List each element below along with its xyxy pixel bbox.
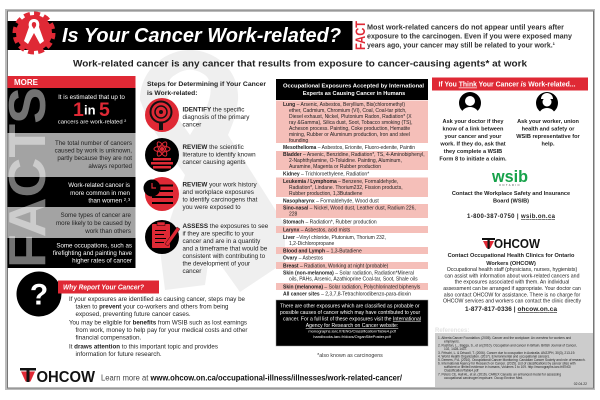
references: 2. Rushton, L., Bagga, S., et al (2010). Occupation and cancer in Britain. British Journal of Cancer, bbox=[438, 344, 577, 348]
fact: men and women: more common in men bbox=[70, 190, 131, 197]
why report text: from work, money to help pay for your medical costs and other bbox=[76, 327, 248, 334]
why report banner: Why Report Your Cancer? bbox=[63, 284, 145, 292]
doctor advice text: Form 8 to initiate a claim. bbox=[439, 156, 507, 162]
table rows: Liver –Vinyl chloride, Plutonium, Thorium 232, bbox=[283, 235, 386, 241]
WSIB contact: Contact the Workplace Safety and Insurance bbox=[452, 191, 570, 197]
fact: types of cancer: more likely to be caused by bbox=[56, 220, 132, 227]
subtitle: Work-related cancer is any cancer that results from exposure to cancer-causing agents* at work bbox=[73, 58, 528, 70]
fact text: exposure to the carcinogen. Even if you were exposed many bbox=[367, 32, 572, 40]
fact text: years ago, your cancer may still be related to your work.¹ bbox=[367, 40, 556, 50]
one in five statistic: 1 bbox=[73, 99, 84, 121]
references: 1. Alberta Cancer Foundation. (2005). Cancer and the workplace: An overview for workers and bbox=[438, 336, 571, 340]
black note box: monographs.iarc.fr/ENG/Classification/Table4.pdf bbox=[308, 328, 397, 334]
references: employers. bbox=[444, 340, 460, 344]
OHCOW contact heading: Contact Occupational Health Clinics for Ontario bbox=[448, 253, 575, 259]
fact: men and women: than women ²˒³ bbox=[88, 198, 130, 204]
icon: worker bbox=[536, 92, 558, 115]
fact: unknown total bbox=[55, 140, 133, 170]
why report text: financial compensation. bbox=[76, 334, 142, 342]
why report icon: question mark bbox=[16, 272, 62, 316]
fact: unknown total: always reported bbox=[88, 163, 133, 170]
fact: occupations: higher rates of cancer bbox=[72, 258, 132, 264]
step 1 text bbox=[182, 106, 250, 128]
fact: occupations: firefighting and painting have bbox=[53, 250, 133, 257]
why report text: information for future research. bbox=[76, 351, 162, 358]
table rows: Rubber production, 1,3Butadiene bbox=[289, 191, 363, 197]
table rows: Skin (melanoma) – Solar radiation, Polychlorinated biphenyls bbox=[283, 284, 421, 290]
table rows: Bladder – Arsenic, Benzidine, Radiation*, TS, 4-Aminobiphenyl, bbox=[283, 152, 425, 158]
black note box: handbooks.iarc.fr/docs/OrganSitePoster.pdf bbox=[313, 334, 392, 339]
WSIB contact: Board (WSIB) bbox=[493, 198, 529, 204]
learn more link: Learn more at www.ohcow.on.ca/occupational-illness/illnesses/work-related-cancer/ bbox=[101, 374, 403, 382]
title bar bbox=[8, 21, 352, 50]
fact: unknown total: partly because they are not bbox=[57, 155, 132, 162]
doctor advice text: work. If they do, ask that bbox=[439, 142, 506, 148]
references: occupational carcinogen exposure. Occup Environ Med. bbox=[444, 376, 523, 380]
step 1 text: IDENTIFY the specific bbox=[182, 106, 244, 114]
OHCOW body text: also contact OHCOW for assistance. There is no charge for bbox=[444, 292, 581, 298]
table rows: Stomach – Radiation*, Rubber production bbox=[283, 220, 377, 226]
union advice text: help. bbox=[541, 142, 555, 148]
one in five statistic: 5 bbox=[99, 99, 110, 121]
OHCOW contact heading: Workers (OHCOW) bbox=[486, 261, 536, 267]
table rows: Leukemia / Lymphoma – Benzene, Formaldehyde, bbox=[283, 179, 398, 185]
table rows: Radiation*, Lindane. Thorium232, Fission products, bbox=[289, 185, 403, 191]
step 4 text: the development of your bbox=[182, 260, 250, 268]
references: 4. World Health Organization. (2017). Environmental and occupational cancers. bbox=[438, 354, 550, 358]
union advice text bbox=[516, 119, 581, 148]
table rows: Lung – Arsenic, Asbestos, Beryllium, Bis(chloromethyl) bbox=[283, 102, 405, 108]
table rows: ray &Gamma), Silica dust, Soot, Tobacco smoking (TS), bbox=[289, 120, 413, 126]
step 2 text: cancer causing agents bbox=[182, 159, 246, 166]
table rows: founding bbox=[289, 138, 308, 144]
table rows: Ovary – Asbestos bbox=[283, 256, 324, 262]
why report text: exposed, preventing future cancer cases. bbox=[76, 311, 191, 318]
steps heading bbox=[147, 81, 266, 97]
step 3 text bbox=[182, 182, 258, 211]
step 4 text bbox=[182, 223, 269, 275]
black note box: Agency for Research on Cancer website: bbox=[306, 323, 398, 329]
step 4 text: if they are specific to your bbox=[182, 230, 254, 238]
why report icon: question mark: ? bbox=[30, 278, 48, 312]
WSIB phone: 1-800-387-0750 | wsib.on.ca bbox=[467, 214, 556, 220]
union advice text: Ask your worker, union bbox=[517, 119, 580, 125]
union advice text: WSIB representative for bbox=[516, 134, 581, 140]
OHCOW body text bbox=[443, 267, 581, 305]
why report text bbox=[69, 296, 248, 358]
why report text: taken to prevent your co-workers and others from being bbox=[76, 304, 229, 310]
table rows: Blood and Lymph – 1,3-Butadiene bbox=[283, 248, 362, 254]
fact text bbox=[367, 22, 572, 50]
steps heading: is Work-related: bbox=[147, 90, 197, 97]
step 2 icon: atom and books bbox=[145, 138, 179, 172]
steps heading: Steps for Determining if Your Cancer bbox=[147, 81, 266, 88]
step 3 text: you were exposed to bbox=[182, 204, 241, 211]
step 4 text: cancer bbox=[182, 268, 201, 275]
table rows: Breast – Radiation, Working at night (probable) bbox=[283, 264, 389, 270]
why report text: If your exposures are identified as causing cancer, steps may be bbox=[69, 296, 245, 303]
icon: doctor bbox=[459, 92, 481, 115]
step 1 text: cancer bbox=[182, 122, 201, 128]
why report banner bbox=[58, 280, 159, 294]
table rows: 2-Naphthylamine, O-Toluidine. Painting, Aluminum, bbox=[289, 158, 402, 164]
one in five statistic bbox=[58, 94, 126, 126]
OHCOW logo: OHCOW bbox=[494, 236, 541, 251]
one in five statistic: It is estimated that up to bbox=[58, 94, 125, 101]
OHCOW logo footer: OHCOW bbox=[36, 369, 96, 386]
table rows: All cancer sites – 2,3,7,8-Tetrachlorodibenzo-para-dioxin bbox=[283, 292, 411, 298]
black note box: There are other exposures which are classified as probable or bbox=[280, 304, 420, 310]
step 4 text: consistent with contributing to bbox=[182, 253, 266, 260]
OHCOW contact heading bbox=[448, 253, 575, 267]
fact: types of cancer: work than others bbox=[84, 228, 131, 235]
table rows: 1,2-Dichloropropane bbox=[289, 241, 335, 247]
fact: occupations bbox=[53, 242, 133, 264]
references: 02.04.22 bbox=[574, 382, 587, 386]
fact: types of cancer bbox=[56, 212, 132, 235]
step 3 text: to identify carcinogens that bbox=[182, 196, 258, 204]
background ribbon watermark bbox=[140, 50, 285, 292]
OHCOW body text: can assist with information about work-related cancers and bbox=[445, 273, 580, 279]
OHCOW body text: the exposures associated with them. An individual bbox=[455, 280, 569, 286]
doctor advice text: they complete a WSIB bbox=[444, 149, 502, 155]
table rows: oils, PAHs, Arsenic, Azathioprine Coal-tar, Soot, Shale oils bbox=[289, 276, 418, 282]
table rows: mining, Rubber or Aluminum production, Iron and steel bbox=[289, 132, 410, 138]
references: 3. Fritschi, L. & Driscoll, T. (2006). Cancer due to occupation in Australia. ANZJPH, 30(3), 213-19. bbox=[438, 351, 575, 355]
title bar: Is Your Cancer Work-related? bbox=[62, 25, 341, 47]
OHCOW body text: assessment can be arranged if appropriate. Your doctor can bbox=[443, 286, 581, 292]
table rows: Kidney – Trichloroethylene, Radiation* bbox=[283, 172, 369, 178]
doctor advice text: know of a link between bbox=[443, 126, 504, 132]
fact: men and women: Work-related cancer is bbox=[68, 182, 130, 189]
table rows: ether, Cadmium, Chromium (VI), Coal, Coal-tar pitch, bbox=[289, 108, 407, 114]
step 2 text: REVIEW the scientific bbox=[182, 144, 244, 151]
step 4 text: cancer and are in a quantity bbox=[182, 238, 261, 245]
step 3 text: and workplace exposures bbox=[182, 189, 254, 196]
doctor advice text: Ask your doctor if they bbox=[443, 119, 504, 125]
footnote: *also known as carcinogens bbox=[317, 353, 383, 359]
step 4 icon: clipboard bbox=[145, 220, 180, 254]
references: 102, 1428-1437. bbox=[444, 347, 467, 351]
why report text: It draws attention to this important topic and provides bbox=[69, 344, 218, 350]
FACTS watermark: FACTS bbox=[0, 87, 57, 268]
black note box bbox=[276, 300, 428, 346]
one in five statistic: in bbox=[84, 102, 96, 118]
icon: gear with ribbon bbox=[14, 14, 54, 52]
panel: occupational exposures table: Occupational Exposures Accepted by International bbox=[283, 84, 424, 90]
doctor advice text: your cancer and your bbox=[445, 134, 502, 140]
panel: occupational exposures table bbox=[276, 79, 428, 346]
fact: types of cancer: Some types of cancer are bbox=[60, 212, 132, 219]
doctor advice text bbox=[439, 119, 507, 162]
step 3 icon: clock and list bbox=[144, 177, 179, 211]
FACT vertical label: FACT bbox=[353, 20, 368, 50]
table rows: Sino-nasal – Nickel, Wood dust, Leather dust, Radium 226, bbox=[283, 206, 416, 212]
table rows: 228 bbox=[289, 212, 298, 218]
panel: occupational exposures table: Experts as Causing Cancer in Humans bbox=[303, 91, 405, 97]
WSIB logo: wsib bbox=[491, 167, 528, 186]
table rows: Skin (non-melanoma) – Solar radiation, Radiation*Mineral bbox=[283, 270, 414, 276]
OHCOW body text: OHCOW services and workers can contact the clinic directly bbox=[443, 299, 581, 305]
table rows bbox=[283, 102, 425, 298]
union advice text: health and safety or bbox=[522, 126, 575, 132]
step 1 icon: magnifier bbox=[145, 98, 179, 132]
panel: more facts: MORE bbox=[14, 78, 39, 87]
step 2 text: literature to identify known bbox=[182, 152, 256, 158]
WSIB contact bbox=[452, 191, 570, 204]
references: sufficient or limited evidence in humans, Volumes 1 to 109. http://monographs.iarc.fr/ENG/ bbox=[444, 365, 571, 369]
black note box: cancer. For a full list of these exposures visit the International bbox=[283, 316, 421, 322]
step 1 text: diagnosis of the primary bbox=[182, 114, 250, 121]
table rows: Auramine, Magenta or Rubber production bbox=[289, 164, 381, 170]
if you think banner bbox=[432, 78, 588, 90]
panel: more facts bbox=[0, 76, 136, 268]
fact: occupations: Some occupations, such as bbox=[56, 242, 132, 250]
one in five statistic: cancers are work-related ² bbox=[58, 120, 126, 126]
OHCOW phone: 1-877-817-0336 | ohcow.on.ca bbox=[465, 306, 557, 313]
references: Classification/Table4.pdf bbox=[444, 368, 478, 372]
if you think banner: If You Think Your Cancer is Work-related... bbox=[438, 82, 576, 88]
fact: unknown total: caused by work is unknown, bbox=[55, 148, 132, 154]
fact: men and women bbox=[68, 182, 131, 204]
step 3 text: REVIEW your work history bbox=[182, 182, 258, 188]
table rows: Larynx – Asbestos, acid mists bbox=[283, 228, 351, 234]
why report text: You may be eligible for benefits from WSIB such as lost earnings bbox=[69, 320, 247, 326]
step 4 text: and a timeframe that would be bbox=[182, 246, 268, 252]
step 2 text bbox=[182, 144, 256, 166]
WSIB logo: ONTARIO bbox=[499, 183, 521, 187]
fact: unknown total: The total number of cancers bbox=[55, 140, 132, 147]
references: 7. Peters CE, Hall AL, et al. (2016). CAREX Canada: an enhanced model for assessing bbox=[438, 372, 561, 376]
OHCOW body text: Occupational health staff (physicians, nurses, hygienists) bbox=[447, 267, 578, 273]
references: 5. Demers, P.A. (2010). Occupational Cancer Monitoring: Canadian Cancer Society and role of research. bbox=[438, 358, 586, 362]
references: 6. International Agency for Research on Cancer. (2015). List of classifications by cancer sites with bbox=[438, 362, 576, 366]
step 4 text: ASSESS the exposures to see bbox=[182, 223, 269, 230]
black note box: possible causes of cancer which may have contributed to your bbox=[280, 310, 420, 316]
table rows: Nasopharynx – Formaldehyde, Wood dust bbox=[283, 198, 379, 204]
table rows: Diesel exhaust, Nickel, Plutonium Radon, Radiation* (X bbox=[289, 114, 412, 120]
fact text: Most work-related cancers do not appear until years after bbox=[367, 22, 564, 32]
references: References: bbox=[435, 328, 469, 334]
references bbox=[435, 328, 593, 387]
table rows: Mesothelioma – Asbestos, Erionite, Fluoro-edenite, Paintin bbox=[283, 145, 415, 151]
table rows: Acheson process. Painting, Coke production, Hematite bbox=[289, 126, 410, 132]
